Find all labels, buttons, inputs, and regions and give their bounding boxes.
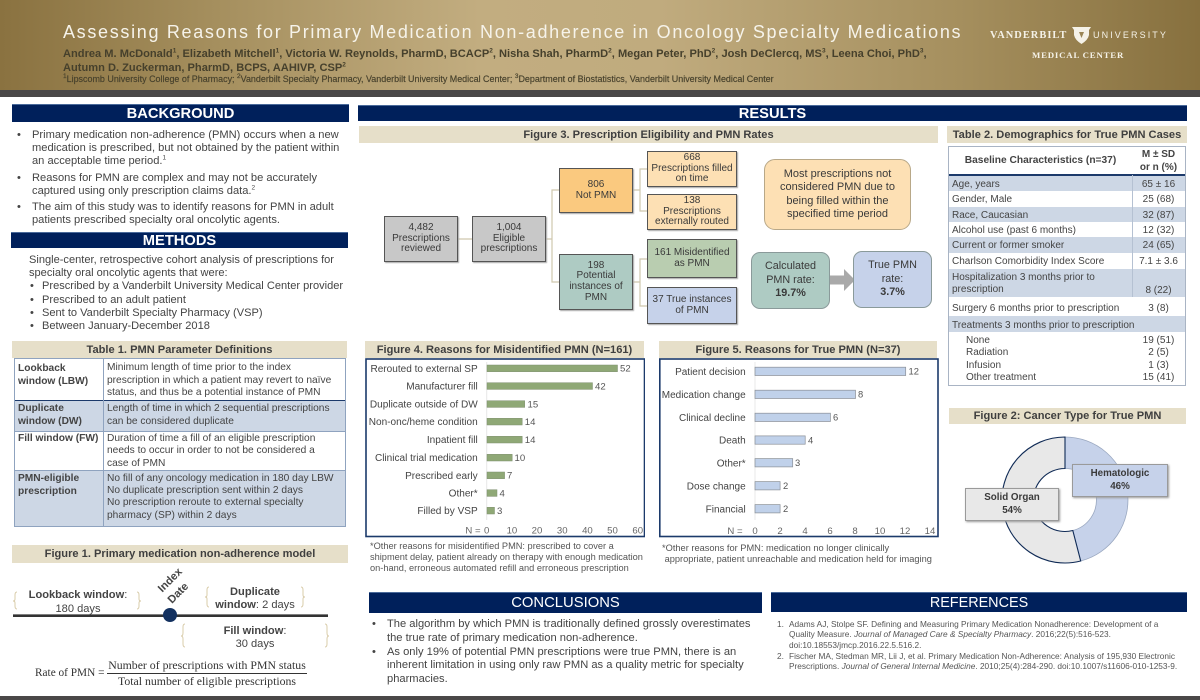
panel: figure 1: [12, 545, 348, 688]
bar chart: misidentified reasons: 60: [632, 526, 643, 536]
table 1 parameter definitions: [14, 358, 346, 527]
background bullets: medication is prescribed, but not obtained by the patient within: [32, 142, 339, 154]
table 2 demographics: Hospitalization 3 months prior to: [952, 272, 1095, 282]
panel: background: [12, 104, 349, 226]
background bullets: patients prescribed specialty oral oncolytic agents.: [32, 214, 280, 226]
table 2 demographics: Race, Caucasian: [952, 210, 1028, 220]
bar chart: true PMN reasons: 4: [802, 526, 808, 537]
heading: figure 4: [365, 341, 644, 358]
box: externally routed: externally routed: [655, 216, 729, 227]
heading: conclusions: CONCLUSIONS: [511, 595, 620, 611]
heading: figure 5: [659, 341, 937, 358]
reference list: doi:10.18553/jmcp.2016.22.5.516.2.: [789, 640, 921, 650]
heading: figure 4: Figure 4. Reasons for Misidentified PMN (N=161): [377, 344, 632, 356]
box: true instances: 37 True instances: [653, 294, 731, 305]
bar chart: true PMN reasons: 3: [795, 457, 800, 468]
callout: most prescriptions not PMN: being filled within the: [786, 194, 889, 206]
conclusions bullets: [372, 618, 750, 685]
footnote: figure 4: *Other reasons for misidentified PMN: prescribed to cover a: [370, 540, 614, 550]
reference list: 1.: [777, 618, 784, 628]
bar chart: true PMN reasons: [659, 358, 939, 538]
table 2 demographics: Other treatment: [966, 372, 1036, 383]
bar chart: true PMN reasons: Clinical decline: [679, 413, 746, 424]
bar chart: true PMN reasons: 10: [875, 526, 885, 537]
conclusions bullets: •: [372, 646, 376, 658]
box: eligible prescriptions: Eligible: [493, 233, 525, 244]
box: filled on time: 668: [684, 152, 700, 163]
bar chart: true PMN reasons: 2: [783, 503, 788, 514]
methods text: [29, 254, 343, 332]
box: eligible prescriptions: prescriptions: [481, 243, 537, 254]
panel: figure 2: [949, 408, 1186, 564]
table 1 parameter definitions: Duration of time a fill of an eligible prescription: [107, 433, 315, 444]
table 2 demographics: Age, years: [952, 178, 1000, 190]
bar chart: misidentified reasons: N =: [465, 526, 481, 536]
table 1 parameter definitions: Fill window (FW): [18, 433, 98, 444]
box: filled on time: Prescriptions filled: [651, 163, 733, 174]
callout: most prescriptions not PMN: considered PMN due to: [780, 181, 895, 193]
bar chart: misidentified reasons: 50: [607, 526, 618, 536]
box: prescriptions reviewed: reviewed: [401, 243, 441, 254]
callout: calculated PMN rate: 19.7%: [775, 287, 806, 299]
label: solid organ: Solid Organ: [984, 492, 1040, 503]
PMN rate formula: Number of prescriptions with PMN status: [108, 658, 306, 672]
table 1 parameter definitions: case of PMN: [107, 458, 165, 469]
bar chart: misidentified reasons: 14: [525, 435, 536, 446]
table 2 demographics: Radiation: [966, 347, 1008, 358]
table 2 demographics: 19 (51): [1143, 335, 1174, 346]
authors: Autumn D. Zuckerman, PharmD, BCPS, AAHIVP, CSP2: [63, 61, 346, 74]
background bullets: The aim of this study was to identify reasons for PMN in adult: [32, 200, 334, 212]
box: filled on time: [647, 151, 737, 187]
table 1 parameter definitions: prescription in which a patient may revert to naïve: [107, 374, 331, 386]
header banner: [0, 0, 1200, 97]
bar chart: misidentified reasons: Inpatient fill: [427, 435, 478, 446]
bar chart: misidentified reasons: Duplicate outside of DW: [370, 400, 478, 411]
table 1 parameter definitions: Duplicate: [18, 403, 64, 414]
background bullets: Primary medication non-adherence (PMN) occurs when a new: [32, 128, 339, 140]
box: not PMN: 806: [588, 179, 604, 190]
callout: most prescriptions not PMN: Most prescriptions not: [784, 168, 891, 180]
footer bar: [0, 696, 1200, 700]
logo: Vanderbilt University Medical Center: VANDERBILT: [990, 30, 1067, 41]
label: hematologic: Hematologic: [1091, 468, 1149, 479]
table 2 demographics: 15 (41): [1143, 372, 1174, 383]
box: externally routed: [647, 194, 737, 230]
methods text: •: [30, 294, 34, 306]
box: prescriptions reviewed: Prescriptions: [392, 233, 450, 244]
methods text: Prescribed by a Vanderbilt University Medical Center provider: [42, 280, 343, 292]
table 2 demographics: [948, 146, 1186, 386]
background bullets: •: [17, 128, 21, 140]
heading: figure 2: [949, 408, 1186, 424]
bar chart: true PMN reasons: 14: [925, 526, 936, 537]
heading: figure 5: Figure 5. Reasons for True PMN (N=37): [696, 344, 900, 356]
box: externally routed: 138: [684, 195, 700, 206]
heading: table 2: Table 2. Demographics for True PMN Cases: [953, 128, 1181, 140]
methods text: •: [30, 307, 34, 319]
methods text: Between January-December 2018: [42, 320, 210, 332]
heading: methods: METHODS: [143, 232, 216, 248]
table 1 parameter definitions: PMN-eligible: [18, 473, 79, 484]
conclusions bullets: The algorithm by which PMN is traditionally defined grossly overestimates: [387, 618, 750, 630]
box: potential instances: instances of: [569, 281, 623, 292]
reference list: Quality Measure. Journal of Managed Care & Specialty Pharmacy. 2016;22(5):516-523.: [789, 629, 1111, 639]
table 1 parameter definitions: window (LBW): [18, 376, 88, 386]
table 1 parameter definitions: No fill of any oncology medication in 180 day LBW: [107, 473, 334, 484]
background bullets: [17, 128, 339, 226]
bar chart: true PMN reasons: Dose change: [687, 481, 746, 492]
table 2 demographics: Treatments 3 months prior to prescription: [952, 320, 1134, 330]
logo: Vanderbilt University Medical Center: MEDICAL CENTER: [1032, 50, 1124, 60]
heading: figure 2: Figure 2: Cancer Type for True PMN: [974, 410, 1161, 422]
footnote: figure 5: [662, 542, 932, 564]
box: potential instances: PMN: [585, 292, 607, 303]
PMN rate formula: Total number of eligible prescriptions: [118, 674, 296, 688]
timeline model: [13, 565, 329, 650]
callout: most prescriptions not PMN: [764, 159, 911, 230]
bar chart: misidentified reasons: [365, 358, 645, 538]
bar chart: true PMN reasons: Financial: [706, 504, 746, 515]
heading: figure 3: Figure 3. Prescription Eligibility and PMN Rates: [523, 128, 774, 140]
heading: methods: [11, 232, 348, 248]
reference list: Adams AJ, Stolpe SF. Defining and Measuring Primary Medication Nonadherence: Development of a: [789, 618, 1158, 628]
logo: Vanderbilt University Medical Center: UNIVERSITY: [1093, 30, 1168, 40]
reference list: Fischer MA, Stedman MR, Lii J, et al. Primary Medication Non-Adherence: Analysis of 195,930 Electronic: [789, 650, 1175, 660]
callout: true PMN rate: 3.7%: [880, 286, 905, 298]
table 2 demographics: 7.1 ± 3.6: [1139, 256, 1178, 267]
donut chart: cancer type: [1002, 436, 1128, 564]
callout: true PMN rate: rate:: [882, 273, 903, 285]
footnote: figure 4: shipment delay, patient already on therapy with enough medication: [370, 552, 643, 562]
callout: calculated PMN rate: [751, 252, 830, 309]
table 2 demographics: M ± SD: [1142, 149, 1175, 160]
heading: table 1: Table 1. PMN Parameter Definitions: [86, 344, 272, 356]
box: potential instances: 198: [588, 260, 604, 271]
bar chart: true PMN reasons: N =: [727, 526, 743, 537]
box: misidentified: [647, 239, 737, 278]
authors: [63, 47, 927, 74]
footnote: figure 4: on-hand, erroneous automated refill and erroneous prescription: [370, 563, 629, 573]
timeline model: 180 days: [55, 603, 101, 615]
timeline model: Lookback window:: [29, 589, 127, 601]
box: true instances: [647, 287, 737, 324]
callout: most prescriptions not PMN: specified time period: [787, 208, 888, 220]
box: potential instances: [559, 254, 633, 310]
background bullets: Reasons for PMN are complex and may not be accurately: [32, 172, 317, 184]
bar chart: misidentified reasons: 20: [532, 526, 542, 536]
bar chart: misidentified reasons: Other*: [449, 489, 478, 500]
timeline model: Index: [156, 565, 185, 595]
table 2 demographics: 3 (8): [1148, 302, 1169, 314]
heading: conclusions: [369, 592, 762, 613]
panel: figure 5: [659, 341, 939, 564]
heading: background: BACKGROUND: [127, 106, 234, 122]
conclusions bullets: the true rate of primary medication non-adherence.: [387, 632, 638, 644]
methods text: specialty oral oncolytic agents that were:: [29, 267, 228, 279]
heading: figure 1: Figure 1. Primary medication non-adherence model: [45, 548, 315, 560]
box: prescriptions reviewed: 4,482: [408, 222, 434, 233]
bar chart: misidentified reasons: 52: [620, 364, 631, 375]
reference list: Prescriptions. Journal of General Internal Medicine. 2010;25(4):284-290. doi:10.1007/s11606-010-1253-9.: [789, 661, 1177, 671]
bar chart: misidentified reasons: Manufacturer fill: [406, 382, 478, 393]
table 2 demographics: 32 (87): [1143, 210, 1174, 220]
table 1 parameter definitions: No duplicate prescription sent within 2 days: [107, 485, 303, 496]
table 2 demographics: Surgery 6 months prior to prescription: [952, 302, 1119, 314]
label: solid organ: [965, 488, 1059, 521]
bar chart: misidentified reasons: 3: [497, 506, 502, 517]
bar chart: true PMN reasons: 8: [852, 526, 858, 537]
PMN rate formula: [35, 658, 307, 688]
bar chart: misidentified reasons: 10: [507, 526, 517, 536]
panel: figure 3: [359, 126, 938, 326]
heading: results: RESULTS: [739, 106, 806, 122]
panel: references: [771, 592, 1187, 671]
bar chart: misidentified reasons: Rerouted to external SP: [370, 364, 478, 375]
table 2 demographics: None: [966, 335, 990, 346]
table 2 demographics: 65 ± 16: [1142, 178, 1175, 190]
panel: table 2: [947, 126, 1187, 386]
conclusions bullets: pharmacies.: [387, 673, 448, 685]
box: prescriptions reviewed: [384, 216, 458, 262]
background bullets: •: [17, 172, 21, 184]
heading: background: [12, 104, 349, 122]
table 2 demographics: Current or former smoker: [952, 240, 1064, 251]
table 2 demographics: Baseline Characteristics (n=37): [965, 155, 1116, 166]
label: hematologic: 46%: [1110, 480, 1130, 492]
bar chart: true PMN reasons: 8: [858, 389, 863, 400]
bar chart: true PMN reasons: Medication change: [662, 390, 746, 401]
table 1 parameter definitions: prescription: [18, 486, 77, 496]
panel: figure 4: [365, 341, 645, 573]
reference list: [777, 618, 1177, 671]
heading: results: [358, 105, 1187, 121]
bar chart: misidentified reasons: 4: [500, 488, 506, 499]
panel: methods: [11, 232, 348, 332]
methods text: Single-center, retrospective cohort analysis of prescriptions for: [29, 254, 334, 266]
bar chart: true PMN reasons: 6: [833, 412, 838, 423]
label: solid organ: 54%: [1002, 504, 1022, 516]
box: not PMN: [559, 168, 633, 213]
bar chart: misidentified reasons: 40: [582, 526, 593, 536]
affiliations: 1Lipscomb University College of Pharmacy; 2Vanderbilt Specialty Pharmacy, Vanderbilt University Medical Center; 3Department of Biostatistics, Vanderbilt University Medical Center: [63, 73, 774, 84]
box: not PMN: Not PMN: [576, 190, 616, 200]
methods text: •: [30, 280, 34, 292]
table 2 demographics: 24 (65): [1143, 240, 1174, 251]
bar chart: true PMN reasons: 4: [808, 434, 813, 445]
bar chart: true PMN reasons: 12: [908, 366, 919, 377]
conclusions bullets: •: [372, 618, 376, 630]
callout: calculated PMN rate: Calculated: [765, 260, 816, 272]
methods text: Prescribed to an adult patient: [42, 294, 186, 306]
box: misidentified: 161 Misidentified: [654, 247, 730, 258]
callout: true PMN rate: [853, 251, 932, 308]
conclusions bullets: As only 19% of potential PMN prescriptions were true PMN, there is an: [387, 646, 736, 658]
heading: table 2: [947, 126, 1187, 143]
heading: references: REFERENCES: [930, 594, 1028, 610]
label: hematologic: [1072, 464, 1168, 497]
table 2 demographics: Infusion: [966, 360, 1001, 371]
table 1 parameter definitions: Lookback: [18, 363, 66, 374]
arrow: calculated to true: [830, 269, 853, 291]
poster title: Assessing Reasons for Primary Medication Non-adherence in Oncology Specialty Medications: [63, 22, 962, 42]
bar chart: misidentified reasons: 42: [595, 381, 606, 392]
table 2 demographics: Alcohol use (past 6 months): [952, 224, 1076, 236]
methods text: Sent to Vanderbilt Specialty Pharmacy (VSP): [42, 307, 263, 319]
box: filled on time: on time: [676, 173, 708, 184]
table 1 parameter definitions: can be considered duplicate: [107, 416, 234, 426]
heading: figure 3: [359, 126, 938, 143]
timeline model: 30 days: [236, 638, 275, 650]
bar chart: misidentified reasons: 10: [514, 453, 525, 464]
footnote: figure 5: appropriate, patient unreachable and medication held for imaging: [665, 554, 932, 564]
timeline model: Duplicate: [230, 586, 280, 598]
bar chart: true PMN reasons: Patient decision: [675, 367, 746, 378]
table 2 demographics: Charlson Comorbidity Index Score: [952, 256, 1104, 267]
bar chart: misidentified reasons: 7: [507, 471, 512, 482]
table 2 demographics: 2 (5): [1148, 347, 1169, 358]
box: eligible prescriptions: 1,004: [496, 222, 522, 233]
timeline model: Fill window:: [224, 625, 286, 637]
bar chart: misidentified reasons: 30: [557, 526, 568, 536]
table 2 demographics: prescription: [952, 284, 1004, 295]
panel: conclusions: [369, 592, 762, 685]
table 2 demographics: 12 (32): [1143, 224, 1174, 236]
bar chart: true PMN reasons: 2: [777, 526, 783, 537]
table 1 parameter definitions: window (DW): [18, 416, 82, 426]
table 1 parameter definitions: needs to occur in order to not be considered a: [107, 445, 315, 456]
table 2 demographics: 25 (68): [1143, 194, 1174, 205]
background bullets: an acceptable time period.1: [32, 154, 166, 167]
bar chart: true PMN reasons: 12: [900, 526, 910, 537]
bar chart: true PMN reasons: 0: [752, 526, 758, 537]
box: misidentified: as PMN: [674, 258, 710, 268]
heading: references: [771, 592, 1187, 612]
bar chart: misidentified reasons: Filled by VSP: [417, 506, 478, 517]
heading: figure 1: [12, 545, 348, 563]
box: true instances: of PMN: [675, 304, 709, 316]
callout: true PMN rate: True PMN: [868, 259, 917, 271]
bar chart: misidentified reasons: Non-onc/heme condition: [369, 417, 478, 428]
background bullets: captured using only prescription claims data.2: [32, 184, 255, 197]
table 2 demographics: Gender, Male: [952, 194, 1012, 205]
reference list: 2.: [777, 650, 784, 660]
timeline model: window: 2 days: [214, 599, 295, 611]
conclusions bullets: inherent limitation in using only raw PMN as a quality metric for specialty: [387, 659, 744, 671]
logo: Vanderbilt University Medical Center: [990, 27, 1168, 60]
bar chart: misidentified reasons: 14: [525, 417, 536, 428]
table 1 parameter definitions: status, and thus be a potential instance of PMN: [107, 387, 320, 398]
footnote: figure 4: [370, 540, 643, 573]
table 1 parameter definitions: pharmacy (SP) within 2 days: [107, 510, 237, 521]
table 1 parameter definitions: No prescription reroute to external specialty: [107, 497, 304, 508]
bar chart: misidentified reasons: 0: [484, 526, 489, 536]
bar chart: true PMN reasons: 2: [783, 480, 788, 491]
table 2 demographics: 8 (22): [1145, 284, 1172, 296]
bar chart: true PMN reasons: Other*: [717, 458, 746, 469]
bar chart: true PMN reasons: Death: [719, 436, 746, 447]
table 2 demographics: or n (%): [1140, 162, 1177, 172]
heading: table 1: [12, 341, 347, 358]
bar chart: misidentified reasons: Prescribed early: [405, 471, 478, 482]
box: potential instances: Potential: [577, 270, 615, 281]
callout: calculated PMN rate: PMN rate:: [766, 274, 815, 286]
panel: table 1: [12, 341, 347, 527]
methods text: •: [30, 320, 34, 332]
table 1 parameter definitions: Minimum length of time prior to the index: [107, 362, 291, 373]
bar chart: true PMN reasons: 6: [827, 526, 833, 537]
box: externally routed: Prescriptions: [663, 206, 721, 217]
box: eligible prescriptions: [472, 216, 546, 262]
connector lines: [458, 168, 647, 307]
footnote: figure 5: *Other reasons for PMN: medication no longer clinically: [662, 542, 889, 552]
timeline model: Date: [166, 581, 191, 606]
bar chart: misidentified reasons: Clinical trial medication: [375, 453, 478, 464]
table 1 parameter definitions: Length of time in which 2 sequential prescriptions: [107, 403, 330, 414]
bar chart: misidentified reasons: 15: [528, 399, 538, 410]
background bullets: •: [17, 200, 21, 212]
PMN rate formula: Rate of PMN =: [35, 667, 104, 679]
authors: Andrea M. McDonald1, Elizabeth Mitchell1, Victoria W. Reynolds, PharmD, BCACP2, Nisha Shah, PharmD2, Megan Peter, PhD2, Josh DeClercq, MS3, Leena Choi, PhD3,: [63, 47, 927, 60]
table 2 demographics: 1 (3): [1148, 360, 1169, 371]
